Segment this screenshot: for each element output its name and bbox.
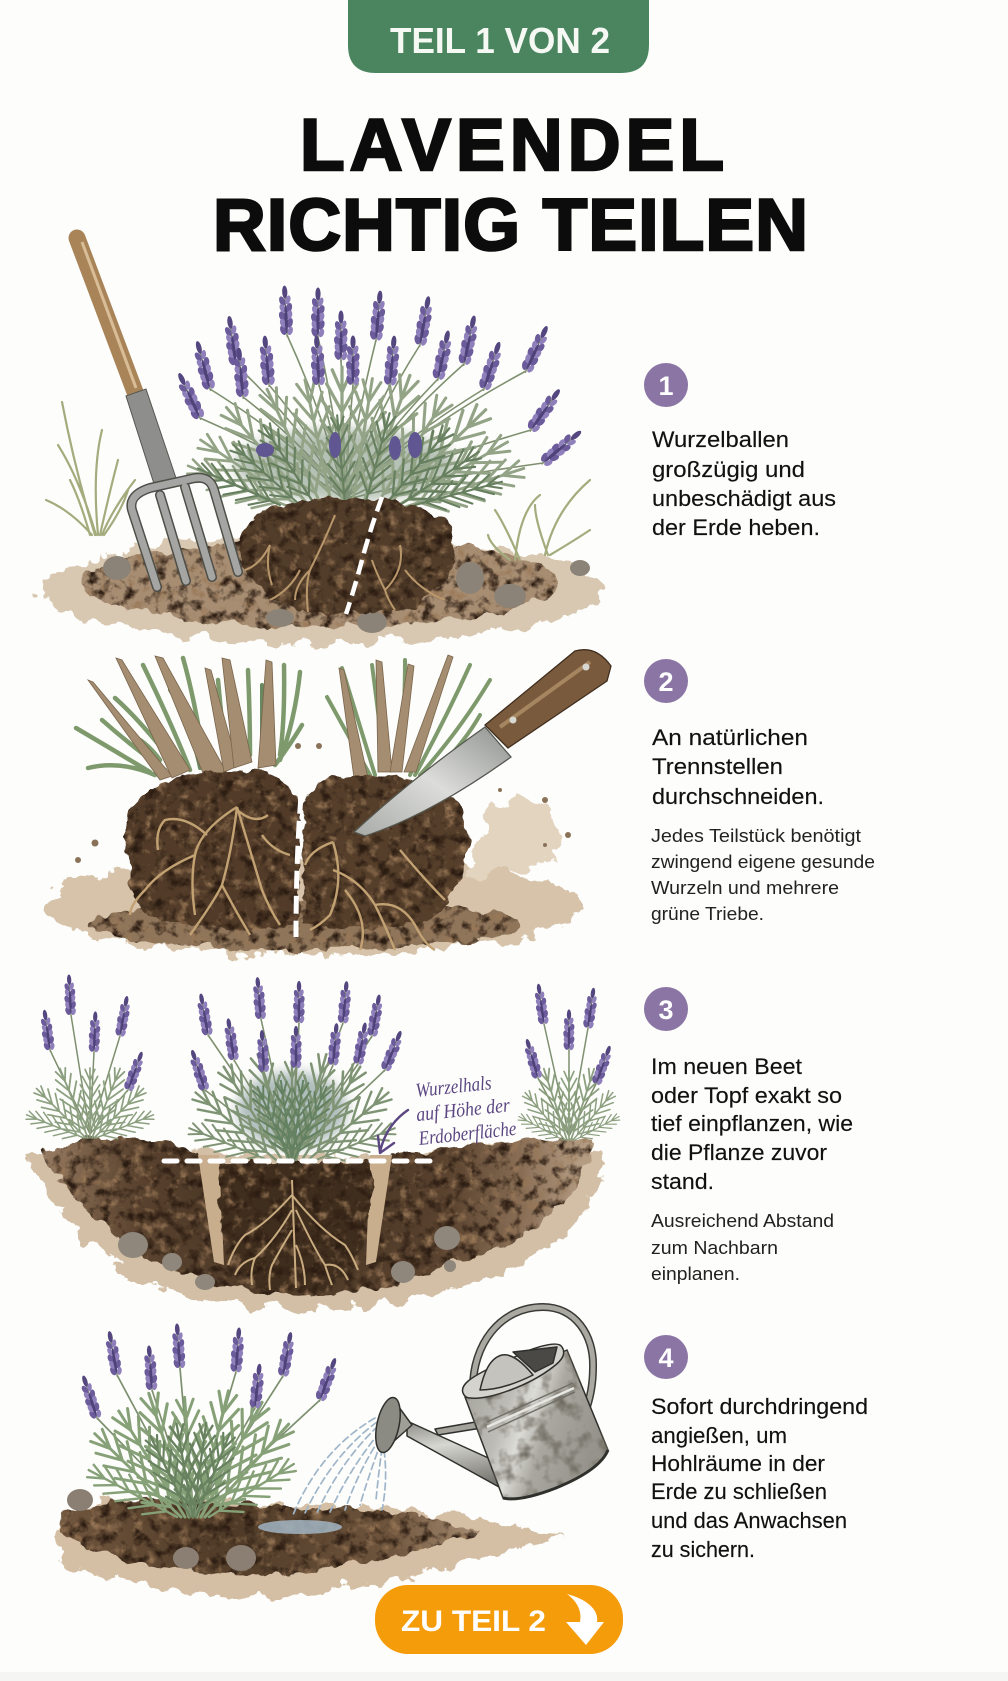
planted root ball bbox=[218, 1165, 372, 1291]
step 4 text: Erde zu schließen bbox=[651, 1479, 827, 1504]
roots bbox=[245, 515, 445, 612]
step 4 text: angießen, um bbox=[651, 1423, 787, 1448]
step 3 text: tief einpflanzen, wie bbox=[651, 1111, 853, 1136]
button: Zu Teil 2 bbox=[375, 1585, 623, 1654]
illustration: replanting at the same depth bbox=[23, 974, 623, 1311]
left root ball bbox=[125, 770, 300, 929]
step 1 badge bbox=[644, 363, 688, 407]
title bbox=[213, 105, 808, 266]
title: RICHTIG TEILEN bbox=[213, 185, 808, 266]
roots bbox=[228, 1180, 358, 1290]
can rose bbox=[383, 1399, 412, 1451]
step 1 text: unbeschädigt aus bbox=[652, 486, 836, 511]
step 2 text: An natürlichen bbox=[652, 725, 808, 750]
can hood bbox=[480, 1355, 533, 1390]
step 2 text: Jedes Teilstück benötigt bbox=[651, 825, 861, 846]
icon: curved down arrow bbox=[566, 1594, 604, 1645]
step 2 text: durchschneiden. bbox=[652, 784, 824, 809]
step 3 text: die Pflanze zuvor bbox=[651, 1140, 828, 1165]
step 1 text bbox=[644, 363, 836, 540]
step 3 text: einplanen. bbox=[651, 1263, 740, 1284]
centre lavender bbox=[184, 977, 407, 1172]
step 2 text: grüne Triebe. bbox=[651, 903, 764, 924]
step 4 text: Sofort durchdringend bbox=[651, 1394, 868, 1419]
step 1 text: großzügig und bbox=[652, 457, 805, 482]
step 2 text: zwingend eigene gesunde bbox=[651, 851, 875, 872]
step 3 text: Im neuen Beet bbox=[651, 1054, 803, 1079]
step 2 badge: 2 bbox=[658, 667, 674, 697]
water stream and puddle bbox=[258, 1418, 386, 1534]
soil bed bbox=[50, 1489, 560, 1597]
illustration: splitting the root ball with a knife bbox=[42, 650, 611, 955]
step 2 text: Trennstellen bbox=[652, 754, 783, 779]
annotation: root neck: Erdoberfläche bbox=[417, 1118, 517, 1150]
soil mound bbox=[40, 536, 604, 644]
step 3 text: oder Topf exakt so bbox=[651, 1083, 842, 1108]
can brace bbox=[435, 1420, 488, 1435]
root ball bbox=[240, 499, 455, 614]
illustration: watering in bbox=[50, 1307, 608, 1597]
step 3 text: stand. bbox=[651, 1169, 714, 1194]
step 3 badge: 3 bbox=[658, 995, 674, 1025]
fork bbox=[77, 238, 238, 587]
can handle bbox=[473, 1307, 593, 1407]
step 4 text: Hohlräume in der bbox=[651, 1451, 826, 1476]
step 1 text: Wurzelballen bbox=[652, 427, 789, 452]
can rim bbox=[462, 1344, 564, 1398]
soil cross-section bbox=[28, 1138, 606, 1311]
step 4 badge: 4 bbox=[658, 1343, 674, 1373]
step 2 badge bbox=[644, 659, 688, 703]
step 3 text bbox=[644, 987, 853, 1284]
step 4 text: zu sichern. bbox=[651, 1537, 755, 1562]
right lavender bbox=[515, 983, 623, 1147]
lavender plant bbox=[76, 1323, 342, 1530]
step 4 badge bbox=[644, 1335, 688, 1379]
soil specks bbox=[75, 743, 571, 863]
tab: Teil 1 von 2: TEIL 1 VON 2 bbox=[390, 20, 610, 61]
step 4 text: und das Anwachsen bbox=[651, 1508, 847, 1533]
knife bbox=[354, 650, 611, 836]
step 1 text: der Erde heben. bbox=[652, 515, 820, 540]
step 3 text: Ausreichend Abstand bbox=[651, 1210, 834, 1231]
annotation: root neck: Wurzelhals bbox=[415, 1072, 493, 1102]
grass tufts bbox=[46, 402, 590, 560]
green leaves bbox=[76, 658, 490, 780]
annotation arrow bbox=[378, 1110, 408, 1153]
step 3 badge bbox=[644, 987, 688, 1031]
lavender foliage bbox=[182, 367, 530, 525]
can body bbox=[465, 1350, 608, 1499]
cut line bbox=[346, 497, 382, 614]
illustration: lifting the root ball with a fork bbox=[40, 238, 604, 644]
tab: Teil 1 von 2 bbox=[348, 0, 649, 73]
right root ball bbox=[303, 774, 468, 928]
step 2 text: Wurzeln und mehrere bbox=[651, 877, 839, 898]
step 4 text bbox=[644, 1335, 868, 1562]
can opening bbox=[513, 1347, 557, 1372]
can bands bbox=[487, 1383, 575, 1432]
step 3 text: zum Nachbarn bbox=[651, 1237, 778, 1258]
soil base bbox=[42, 799, 582, 955]
shoots bbox=[88, 655, 453, 780]
annotation: root neck bbox=[412, 1070, 517, 1150]
can spout bbox=[407, 1421, 508, 1492]
step 1 badge: 1 bbox=[658, 371, 674, 401]
lavender stems bbox=[200, 335, 543, 500]
can bottom rim bbox=[503, 1450, 608, 1499]
annotation: root neck: auf Höhe der bbox=[415, 1094, 511, 1126]
lavender flower spikes bbox=[172, 285, 586, 470]
roots bbox=[130, 807, 290, 935]
soil level dashed line bbox=[164, 1158, 431, 1164]
left lavender bbox=[23, 974, 157, 1147]
title: LAVENDEL bbox=[300, 105, 724, 186]
cut line bbox=[296, 796, 301, 937]
button: Zu Teil 2: ZU TEIL 2 bbox=[401, 1605, 546, 1638]
watering can bbox=[371, 1307, 608, 1499]
step 2 text bbox=[644, 659, 875, 924]
